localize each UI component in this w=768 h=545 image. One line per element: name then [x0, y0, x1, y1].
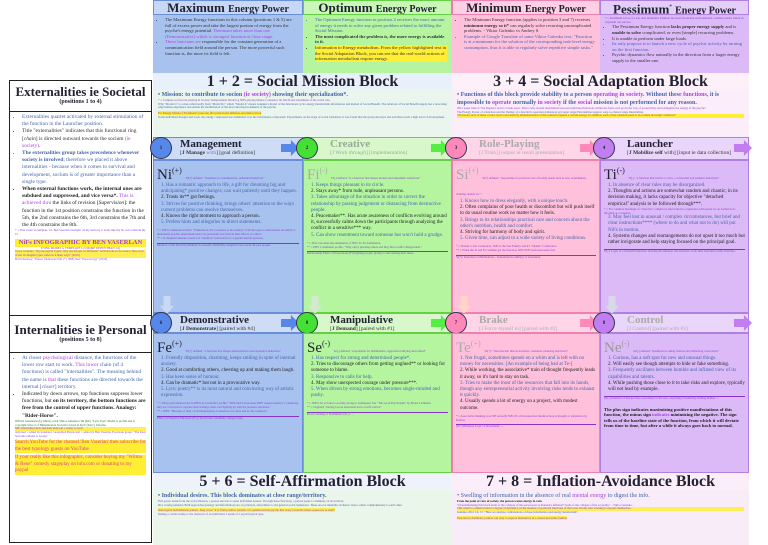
role: launcher: [600, 137, 749, 160]
panel: Ni: 2. Trusts its** gut feelings.: [161, 195, 215, 200]
text: externalities: When external functions work, the internal ones are subdued and suppressed, and vice versa*. This is achieved thru the links of revision [Supervision]: the function in the 1st position constrains the function in the 5th, the 2nd constrains the 6th, 3rd constrains the 7th and the 4th constrains the 8th.: [22, 186, 145, 228]
circles and arrows upper: [150, 137, 752, 159]
text: internalities: If your really like this infographic, consider buying my "Wilma & Rene" comedy stageplay on lulu.com or donating to my paypal: [15, 455, 142, 473]
arrow 3 to 4: [580, 140, 594, 156]
panel: Se: [303, 333, 452, 473]
circle 3: [445, 137, 467, 159]
text: internalities: At closer psychological distance, the functions of the lower row start to work. This lower chain (of 4 functions) is called "internalities". The meaning behind the name is that these functions are directed towards the internal [closer] territory.: [22, 355, 143, 390]
panel: Si: 5. Given time, can adjust to a wide variety of living conditions.: [460, 236, 586, 241]
role: management: Management: [180, 138, 242, 150]
panel: Ni: [153, 160, 303, 313]
header: minimum: Minimum Energy Power: [466, 0, 586, 15]
panel: Ni: 3. Strives for positive thinking, brings others' attention to the ways current problems can resolve themselves.: [161, 202, 294, 213]
panel: Ti: Ti(-) Ti(-): "a function that strives to solve, cool-headed and pedantic behaviour": [604, 166, 719, 183]
text: internalities: [13, 355, 146, 475]
text: self-affirmation: finding a certain stamp to the character of an individual. I speak of a psychological type.: [158, 512, 264, 516]
role: demonstrative: [J Demonstrate] [paired with #4]: [180, 326, 255, 332]
energy text: optimum: The Optimum Energy function in position 2 receives the exact amount of energy it needs to solve any given problem related to fulfilling the Social Mission.: [315, 17, 445, 33]
text: adaptation: • Functions of this block provide stability to a person operating in society. Without these functions, it is impossible to operate normally in society if the social mission is not performed for any reason.: [457, 92, 719, 106]
panel: Si: 4. Striving for harmony of body and spirit.: [460, 230, 545, 235]
panel: Si: 1. Knows how to dress elegantly, with a unique touch.: [460, 199, 568, 204]
text: internalities: italicised = added by translator. Green Red Purple text = added by Ben Vaserlan. Facebook group: "The Real Socionics Model G Group": [15, 430, 145, 438]
panel: Si: Si(+): Sensation of Harmonious - Sensational ie utilitary of awareness.: [456, 255, 541, 259]
panel: Ti: * = For common meanings of "objective"; empirical, that found in conjunction with needs for an formal in its informal as a sensible.: [604, 207, 735, 215]
text: mission: For Energy Metabo ("Dominant") uses the first point in the Inflation-Avoidance block: [158, 111, 261, 115]
text: mission: * = Compare social-role-playing in Society Temperament Model eg NiFs playing Master Counselor. Ni 4th-D and attachment of the social role.: [158, 98, 330, 102]
role: brake: [J Force myself to] [paired with #2]: [479, 326, 558, 332]
energy text: pessimum: [600, 15, 749, 73]
panel: internalities: [9, 315, 152, 543]
panel: Se: * = NiFs's Se is found a socially strong to dominated. See "The Good Psychopath" by Ernest Lichtman.: [307, 401, 431, 405]
panel: Ti: 3. May feel lost in unusual / complex circumstances, but brief and clear instructions**** (where to do and what not to do) will put NiFs in motion.: [608, 215, 740, 233]
panel: Ne: 2. Will easily see though attempts to hide or fake something.: [608, 362, 729, 367]
panel: Ni: Intuition of the Past (Ni) thinking via dreams, disturbing, imaginal notes about the past people.: [157, 243, 271, 247]
text: externalities: USING MODEL G TEMPLATE 1.2 (MORE DEPTH THAN 1.0): [41, 246, 120, 250]
panel: Te: 4. Usually spends a lot of energy on a project, with modest outcome.: [460, 399, 578, 411]
panel: Si: Si(+) Si(+) defined: "responsible for practical care of bodily needs such as rest, nourishment, clothing, shelter etc.": [456, 166, 587, 196]
role bars lower: [153, 313, 749, 333]
panel: Te: (Te+) Business Logic of Investment: ...: [456, 424, 503, 428]
circle 4: 4: [603, 146, 605, 151]
panel: Fe: 5. Lyric poetry** is its most natural and convincing way of artistic expression.: [161, 387, 294, 398]
circle 5: [150, 312, 172, 334]
role: manipulative: [J Demand] [paired with #1]: [330, 326, 394, 332]
text: internalities: Indicated by down arrows, top functions suppress lower functions, but on its territory, the bottom functions are free from the control of upper functions. Analogy: "Rider-Horse".: [22, 391, 146, 419]
text: externalities: [13, 114, 146, 261]
text: externalities: David Keirsey: "Please Understand Me 2" (1998) then "Personology" (2010): [15, 257, 107, 261]
heading: externalities: (positions 1 to 4): [59, 99, 102, 105]
panel: externalities: [9, 80, 152, 342]
panel: Fe: ** = INFJ: "Because of their of all imaginations, Counselors are often and art the sculpture": [157, 409, 267, 413]
text: mission: [153, 89, 452, 137]
text: adaptation: 2012 paper item 4: "the Registry need to break apart. That is why should intermittent between individual functions within the form each get in the way of productivity and extinguish the energy of the psyche": [457, 106, 706, 110]
text: self-affirmation: Ontological individuation pattern. Jung wrote "it is from positive analysis of a gender-neutral psyche that every reconcile when a person is in itself": [158, 508, 335, 512]
circle 2: [296, 137, 318, 159]
role: launcher: Launcher: [627, 138, 673, 150]
text: internalities: Search YouTube for the channel 'Ben Vaserlan' then subscribe for the best typology guests on YouTube: [15, 440, 146, 452]
role: management: [J Manage with] [goal definition]: [180, 150, 255, 156]
down arrows: [160, 296, 619, 313]
role bars upper: [153, 137, 749, 160]
arrow 8 to 5: [734, 315, 752, 331]
panel: Ni: * = INFJ Communist Profile: "Futhermore, the Counselor is most likely of all the types to demonstrate an ability to understand psychic phenomena and to be personally involved in their effects on others.": [157, 228, 295, 236]
panel: Ti: 1. In absence of clear rules may be disorganized.: [608, 183, 705, 188]
role: manipulative: [303, 313, 452, 333]
text: self-affirmation: Full quote: Aside from the social mission, a person also has to meet individual desires. Through these functions, a person seeks to dominate on its territory.: [158, 499, 344, 503]
text: mission: In the individual thought and work, the energy component has dominated over the information component. Experiments on the stage of social formation, it was found that the group develops and activities reach a high level of development.: [158, 115, 445, 119]
text: externalities: Victor Gulenko: "Psychological Types: Why Are People So Different" All Portraits in Socionics. Here each of the 16 Jungian types varies in 4 main ways" (2019): [15, 249, 144, 257]
column headers: [153, 0, 749, 15]
down arrow 3: [458, 296, 470, 313]
header: maximum: Maximum Energy Power: [167, 0, 289, 15]
role: creative: [J Work through] [implementation]: [330, 150, 407, 156]
text: self-affirmation: Ds's closing remarks: Both approaches (energy and information) are, in principle, subordinate to the general social tendencies. These are not mutually exclusive views, rather complementary to each other.: [158, 503, 402, 507]
energy text: minimum: Example of Google Translate of same Viktor Gulenko text: "Function is at a minimum for the solution of the corresponding task-level energy consumption, thus it is able to regularly solve repetitive simple tasks.": [464, 34, 595, 50]
text: inflation-avoidance: "Overstimulating this block leads to the collapse of the person just as monetary inflation* leads to the collapse of the economy." - Viktor Gulenko.: [457, 503, 633, 507]
arrow 7 to 8: [580, 315, 594, 331]
block title: self-affirmation: 5 + 6 = Self-Affirmation Block: [199, 473, 406, 490]
panel: Fe: Ethics of Negative Emotions (Fe-): facial tone, solemnity, disapproving: [157, 416, 243, 420]
text: externalities: NiFs INFOGRAPHIC BY BEN VASERLAN: [19, 239, 142, 246]
down arrow 2: [308, 296, 322, 314]
panel: Fe: [153, 333, 303, 473]
energy text: maximum: These functions are responsible for the constant generation of a communication field around the person. The more powerful such function is, the more its field is felt.: [165, 39, 284, 56]
panel: Ni: 5. Prefers hints and allegories to direct statements.: [161, 220, 262, 225]
text: internalities: Official translation (by Maria) of Dr Viktor Gulenko's TR (RU) "Lyric Poet" Model G profile and is copyright School of Humanitarian Socionics based in Kyiv (Kiev), Ukraine.: [15, 419, 135, 427]
panel: Ne: The plus sign indicates maximizing positive manifestations of this function, the minus sign indicates minimizing the negative. The sign tells us of the baseline state of the function, from which it will deviate from time to time, but after a while it always goes back to normal.: [604, 407, 739, 428]
text: externalities: Externalities quartet activated by external stimulation of the function in the Launcher position.: [22, 114, 143, 127]
energy text: pessimum: The Pessimum Energy function lacks proper energy supply and is unable to solve complicated, or even [simple] recurring problems.: [612, 24, 736, 35]
heading: internalities: Internalities ie Personal: [14, 322, 147, 337]
role: role-playing: Role-Playing: [479, 138, 540, 150]
panel: Fi: ** = INFJ Communist profile: "They enjoy pleasing others and they find conflict disagreeable.": [307, 245, 422, 249]
panel: Fe: 3. Has keen sense of humour.: [161, 375, 220, 380]
heading: externalities: Externalities ie Societal: [16, 84, 145, 99]
energy text: optimum: Information to Energy metabolism. From the yellow highlighted text in the Social Adaptation Block, you can see that the real-world actions of information metabolism require energy.: [315, 45, 446, 61]
panel: Fe: 2. Good at comforting others, cheering up and making them laugh.: [161, 368, 294, 373]
panel: Fi: Relationship Ethics of Proportions (Fi) lighting people, giving to and stealing their inner...: [307, 251, 415, 255]
panel: Ti: Ti(-): Logic of a Uniform Structure: viewing the situation, the structure of all other structures, fully from the...: [604, 249, 736, 253]
panel: Se: 1. Has respect for strong and determined people*.: [311, 356, 411, 361]
panel: Fi: 1. Keeps things pleasant in its circle.: [311, 183, 384, 188]
role: control: [J Control] [paired with #3]: [627, 326, 688, 332]
role: manipulative: Manipulative: [330, 314, 393, 326]
circle 8: 8: [603, 321, 605, 326]
energy text: maximum: The Maximum Energy functions in this column (positions 1 & 5) are full of excess power and take the largest portion of energy from the psyche's energy potential. Dominant takes more than one (Demonstrative) which is strongest function at close range.: [165, 17, 292, 39]
panel: Si: * = Thanks to the Counselors, NiFs is the best Elderly and it's "Shame" Conference.: [456, 244, 557, 248]
text: adaptation: [452, 89, 749, 137]
panel: Se: 5. When driven by strong emotions, becomes single-minded and pushy.: [311, 387, 440, 398]
panel: Se: ** = Unglued: "having lost an emotional level of self-control": [307, 405, 382, 409]
role: role-playing: [J Train] [output ie result presentation]: [479, 150, 564, 156]
panel: Te: 3. Tries to make the most of the resources that fall into its hands, though any entrepreneurial activity involving risks tends to exhaust it quickly.: [460, 381, 595, 398]
role: demonstrative: Demonstrative: [180, 314, 249, 326]
panel: Ne: Ne(-) Ne(-) defined: "manifests in taking chances and deflecting overactions": [604, 339, 719, 356]
text: inflation-avoidance: This result is a deterioration to degree of dynamics, in the absence of goals the functions of the lower blocks start working to express themselves.: [457, 506, 631, 510]
panel: Te: Te(+) Te(+): "function that directs incentive, obstinate, enduring behaviour": [456, 339, 568, 356]
energy text: minimum: The Minimum Energy function (applies to position 3 and 7) receives minimum energy so it* can regularly solve recurring uncomplicated problems. - Viktor Gulenko vs Andrey S.: [464, 17, 591, 33]
text: externalities: The externalities group takes precedence whenever society is involved; therefore we placed it above internalities - because when it comes to survival and development, socium is of greater importance than a single type.: [22, 150, 139, 185]
circle 8: [593, 312, 615, 334]
text: self-affirmation: [153, 490, 452, 545]
text: externalities: Title "externalities" indicates that this functional ring [chain] is directed outward towards the socium (ie society).: [22, 128, 136, 149]
panel: Fi: [303, 160, 452, 313]
block title: self-affirmation: [153, 473, 452, 490]
text: inflation-avoidance: • Swelling of information in the absence of real mental energy to digest the info.: [457, 493, 650, 499]
text: inflation-avoidance: From the point of view of society, the person wastes energy in vain.: [457, 499, 542, 503]
text: adaptation: The Energy Power of a function and the Dudley of a function's operation (distance) eg longer range Externalities support easy-to-charter range Internalities: [457, 110, 643, 114]
block title: inflation-avoidance: 7 + 8 = Inflation-Avoidance Block: [486, 473, 715, 490]
panel: Ne: [600, 333, 749, 473]
arrow 4 to 1: [734, 140, 752, 156]
energy text: minimum: [452, 15, 600, 73]
energy text: optimum: [303, 15, 452, 73]
panel: Se: 4. May show unexpected courage under pressure***.: [311, 381, 417, 386]
header: optimum: Optimum Energy Power: [318, 0, 437, 15]
energy text: pessimum: Psychic dynamics flow naturally in the direction from a larger energy supply to the smaller one.: [612, 52, 740, 63]
panel: Fi: Fi(-) Fi(-) defined: "is a function that shapes modest and empathetic behaviour": [307, 166, 421, 183]
energy text: pessimum: It is unable to perform under large loads.: [612, 36, 687, 41]
panel: Si: 3. Brings to its relationships practical care and concern about the other's nutrition, health and comfort.: [460, 218, 590, 229]
arrow 6 to 7: [431, 315, 446, 331]
text: adaptation: "However, each of these correct real to successfully implementation of the solution requires a certain energy. In addition, each of the solutions need to be formed thorough conditions": [457, 113, 676, 117]
panel: Te: 2. While working, the associative* train of thought frequently leads it away, so it's hard to stay on task.: [460, 368, 595, 380]
role: control: [600, 313, 749, 333]
energy text: optimum: The most complicated the problem is, the more energy is available to it.: [315, 34, 444, 44]
panel: Ti: [600, 160, 749, 313]
circle 2: 2: [306, 146, 308, 151]
circle 4: [593, 137, 615, 159]
circle 1: [150, 137, 172, 159]
circle 6: 8: [306, 321, 308, 326]
down arrow 4: [605, 296, 619, 314]
panel: Te: [452, 333, 600, 473]
circle 7: [445, 312, 467, 334]
panel: Ne: (Ne-) Intuition of Perspectives: searching for the new, exploring, broadening, finding hidden ...: [604, 396, 718, 400]
panel: Fi: 3. Takes advantage of the situation in order to correct the relationship by passing judgement or distancing from destructive people.: [311, 195, 441, 213]
text: inflation-avoidance: [452, 490, 749, 545]
energy text: maximum: [153, 15, 303, 73]
text: internalities: NB: alternating black and dark blue text = easier to read: [15, 426, 82, 430]
energy text: pessimum: Its only purpose is to launch a new cycle of psychic activity by turning on the first function.: [612, 41, 742, 52]
panel: Se: 3. Responsive to calls for help.: [311, 375, 373, 380]
block title: social mission: [153, 73, 452, 89]
circle 7: 7: [455, 321, 457, 326]
panel: Se: 2. Tries to discourage others from getting unglued** or looking for someone to blame.: [311, 362, 445, 373]
arrow 5 to 6: [281, 315, 296, 331]
panel: Fe: 4. Can be dramatic* but not in a provocative way.: [161, 381, 261, 386]
role: management: [153, 137, 303, 160]
text: self-affirmation: • Individual desires. This block dominates at close range/territory.: [158, 493, 327, 499]
energy text: pessimum: * = Pessimum is how for less than minimum. Pelmun: the least favourable environmental condition under which an organism can survive.: [605, 16, 744, 24]
circle 1: 1: [160, 146, 162, 151]
panel: Ni: 1. Has a romantic approach to life, a gift for dreaming big and anticipating* positive changes; can wait patiently until they happen.: [161, 183, 297, 194]
panel: Fi: * = This correlates the submission of NiFs for Fe domination.: [307, 241, 381, 245]
panel: Se: Power Sensing of Dominance (Se-): ...: [307, 412, 353, 416]
heading: internalities: [10, 316, 151, 353]
panel: Ti: 4. Systems changes and rearrangements do not upset it too much but rather invigorate and help staying focused on the principal goal.: [608, 234, 745, 245]
text: externalities: * = That wasn't in template 1.0. Ben Vaserlan example: on my territory, it looks like my Ne can constrain my Ti.: [15, 228, 146, 236]
panel: Si: ** = When the Ti and Fe combine get the function, NiFs INFJ subconsciously feel.: [456, 248, 556, 252]
role: brake: [452, 313, 600, 333]
panel: Fi: 5. Can show resentment toward someone but won't hold a grudge.: [311, 233, 443, 238]
circle 3: 3: [455, 146, 457, 151]
down arrow 1: [160, 296, 174, 314]
arrow 2 to 3: [431, 140, 446, 156]
panel: Fi: 4. Peacemaker**. Has acute awareness of conflicts evolving around it, successfully calms down the participants through analyzing the conflict in a sensitive*** way.: [311, 214, 447, 231]
role: control: Control: [627, 314, 663, 326]
role: creative: [303, 137, 452, 160]
arrow 1 to 2: [281, 140, 296, 156]
role: demonstrative: [153, 313, 303, 333]
panel: Ne: 4. While pushing those close to it to take risks and explore, typically will not lead by example.: [608, 381, 745, 392]
panel: Fe: * = When performances the in INFJs is Counsellor profile: "With their broad sense INFJ results tendency to authority, they are concerned to express their feelings, their own lighting up with the presence emotions.": [157, 401, 299, 409]
panel: Ne: 1. Curious, has a soft spot for new and unusual things.: [608, 356, 716, 361]
panel: Ni: ** = In Jungian/Gulenko words it is "intuition" referred ties to a gender-neutral pronoun.: [157, 236, 264, 240]
panel: Ne: 3. Frequently oscillates between humble and inflated view of its capabilities and talents.: [608, 368, 736, 380]
text: mission: • Mission: to contribute to socion (ie society) showing their specialization*.: [158, 92, 348, 98]
panel: Se: Se(-) Se(-) defined: "responsible for intimidation, aggressive bullying and refusal": [307, 339, 426, 356]
panel: Fe: 1. Friendly disposition, charming, keeps smiling in spite of internal anxiety.: [161, 356, 295, 367]
heading: internalities: (positions 5 to 8): [59, 337, 102, 343]
text: inflation-avoidance: Function in dominant position can only to express themselves in a casual and stable fashion: [457, 516, 567, 520]
role: creative: Creative: [330, 138, 370, 150]
panel: Fe: Fe(+) Fe(+) defined: "a function that shapes demonstrative and expressive behaviour": [157, 339, 281, 356]
text: mission: Why "Model G" is a map called really from "Model Ro" which "Model A" means Gulenko's model of the functional cycle: energy metabolism, information and mutual of Social Benefit. The relations of Social Benefit supply has a relocating edge human experience and enable the mobilization of the most developed elements of the psyche.: [158, 102, 447, 109]
panel: Si: 2. Often complains of poor health or discomfort but will push itself to do usual routine work no matter how it feels.: [460, 205, 594, 216]
role: launcher: [J Mobilize self with] [input ie data collection]: [627, 150, 731, 156]
circles and arrows lower: [150, 312, 752, 333]
heading: externalities: [10, 81, 151, 112]
panel: Ni: 4. Knows the right moment to approach a person.: [161, 214, 260, 219]
panel: Ni: Ni(+) Ni(+) defined: "visualises in contemplative, unhurried behaviour": [157, 166, 264, 183]
panel: Si: [452, 160, 600, 313]
circle 5: 6: [160, 321, 162, 326]
panel: Fi: 2. Stays away* from rude, unpleasant persons.: [311, 189, 404, 194]
panel: Ti: 2. Thoughts and actions are somewhat random and chaotic; in its decision making, it lacks capacity for objective "detached empirical" analysis to be followed through***.: [608, 189, 738, 207]
role: role-playing: [452, 137, 600, 160]
panel: Te: 1. Not frugal, sometimes spends on a whim and is left with no money for necessities. [An example of being bad at Te-]: [460, 356, 584, 367]
text: inflation-avoidance: Gulenko 2012 Ch. 15: "Here we analyze combinations of these information and energy metabolism".: [457, 510, 578, 514]
role: brake: Brake: [479, 314, 508, 326]
circle 6: [296, 312, 318, 334]
panel: Te: * = Associative thinking was NiF Actually NiFs Ni of Introspection Intuition here is thought or adaptation by Rodion.: [456, 414, 587, 422]
